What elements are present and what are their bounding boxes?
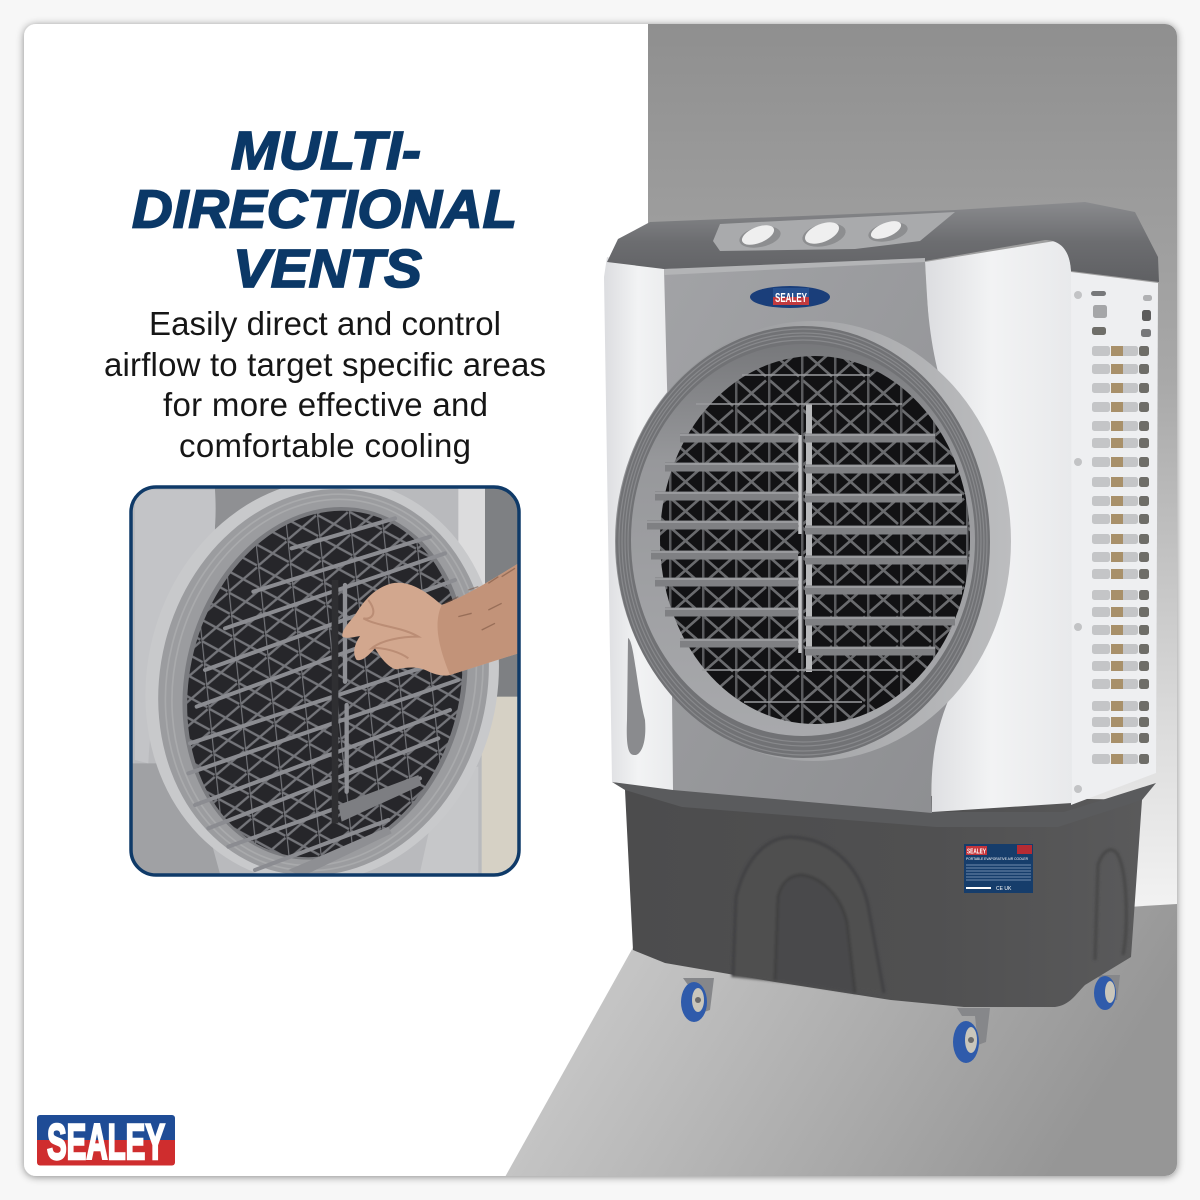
front grey panel — [664, 261, 985, 813]
inset photo: hand adjusting vents — [129, 485, 521, 877]
description text: for more effective and — [163, 386, 488, 423]
specification label — [964, 844, 1033, 893]
inset vertical handles — [345, 585, 347, 792]
side grille panel — [1071, 272, 1158, 805]
casters — [681, 975, 1120, 1063]
vent ring — [615, 321, 1011, 761]
inset background — [132, 488, 482, 874]
right white body panel — [925, 241, 1072, 812]
title: VENTS — [233, 239, 422, 299]
specification label: PORTABLE EVAPORATIVE AIR COOLER — [966, 857, 1028, 861]
sealey badge: SEALEY — [775, 290, 807, 305]
backdrop wall — [648, 24, 1178, 906]
description text: airflow to target specific areas — [104, 346, 546, 383]
air cooler product — [604, 202, 1159, 1063]
title — [132, 121, 517, 299]
sealey badge — [750, 286, 830, 308]
sealey logo — [37, 1114, 175, 1170]
vent opening with lattice — [650, 350, 980, 730]
tank arches — [733, 837, 1126, 993]
top vent openings — [1091, 291, 1106, 296]
title: MULTI- — [231, 121, 421, 181]
hand and arm — [342, 563, 518, 676]
sealey logo: SEALEY — [47, 1114, 165, 1170]
top cap with control panel — [607, 202, 1159, 282]
inset louvres — [188, 518, 458, 870]
title: DIRECTIONAL — [132, 180, 517, 240]
water level window — [627, 638, 645, 755]
panel: studio backdrop — [505, 24, 1178, 1177]
description text — [104, 305, 546, 464]
inset vent ring — [150, 488, 499, 874]
backdrop floor — [505, 904, 1178, 1177]
left white body panel — [604, 257, 680, 790]
description text: Easily direct and control — [149, 305, 501, 342]
specification label: SEALEY — [967, 848, 986, 856]
control knobs — [737, 218, 909, 251]
control panel — [713, 212, 955, 251]
vent louvres — [647, 375, 967, 702]
vertical adjusters — [798, 435, 802, 653]
description text: comfortable cooling — [179, 427, 471, 464]
water tank — [612, 782, 1156, 1007]
specification label: CE UK — [996, 886, 1012, 892]
grille slots — [1092, 346, 1138, 764]
